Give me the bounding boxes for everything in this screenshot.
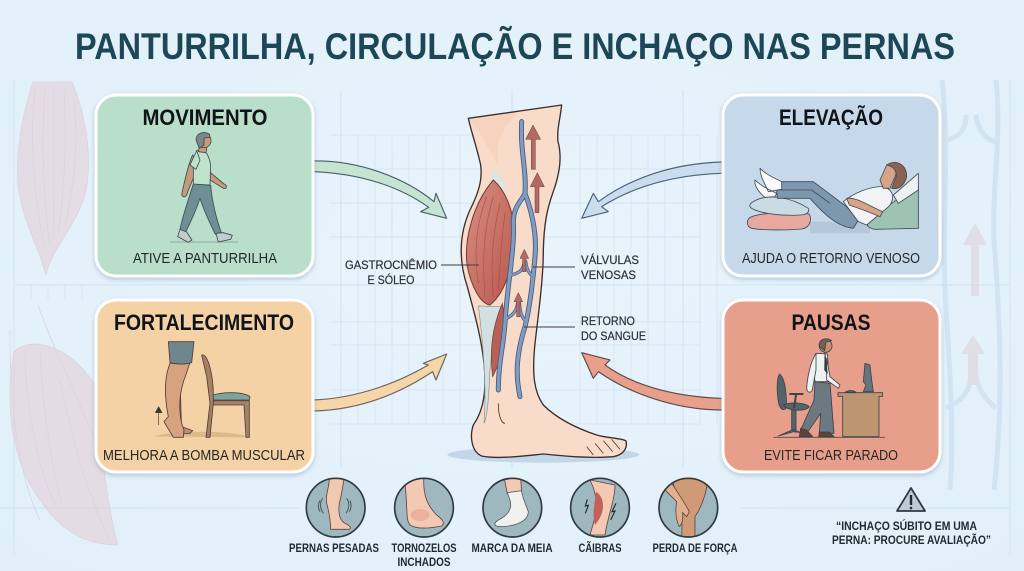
warning text: PERNA: PROCURE AVALIAÇÃO” [832,532,991,547]
heading: elevacao: ELEVAÇÃO [779,105,883,130]
caption: fortalecimento: MELHORA A BOMBA MUSCULAR [103,447,305,464]
symptom: pernas pesadas: PERNAS PESADAS [289,543,379,555]
icon: person resting with legs elevated [747,162,918,233]
panel: pausas [723,300,940,472]
symptom: marca da meia [472,477,552,555]
symptom: tornozelos inchados [392,477,457,569]
icon: walking person [170,133,238,242]
label: retorno do sangue [524,314,646,343]
label: retorno do sangue: RETORNO [581,314,635,328]
arrow: movimento to leg [313,161,447,218]
warning text: “INCHAÇO SÚBITO EM UMA [836,518,977,533]
warning text [832,518,991,547]
background: faint calf muscle bottom left [10,305,118,545]
caption: movimento: ATIVE A PANTURRILHA [133,250,277,267]
panel: fortalecimento [96,300,313,472]
label: gastrocnemio e soleo [345,257,479,287]
central leg illustration [447,105,639,463]
heading: movimento: MOVIMENTO [142,105,268,130]
icon: person leaving office desk [773,339,885,437]
arrow: elevacao to leg [582,162,722,218]
heading: fortalecimento: FORTALECIMENTO [114,310,294,335]
symptom: pernas pesadas [289,477,379,555]
label: retorno do sangue: DO SANGUE [581,329,646,343]
icon: calf raise with chair [154,342,252,437]
heading: pausas: PAUSAS [792,310,870,335]
symptom: caibras [571,478,629,555]
label: valvulas venosas [533,252,639,282]
symptom: perda de forca [652,477,738,555]
symptom: marca da meia: MARCA DA MEIA [472,543,552,555]
label: valvulas venosas: VÁLVULAS [581,252,639,267]
panel: elevacao [723,95,940,276]
background: faint veins and arrows right [942,80,1000,490]
label: valvulas venosas: VENOSAS [581,268,636,282]
arrow: pausas to leg [582,353,722,410]
background: faint calf muscle top left [18,82,89,275]
symptom: tornozelos inchados: INCHADOS [398,557,451,569]
symptom: caibras: CÃIBRAS [578,542,622,555]
arrow: fortalecimento to leg [313,354,447,411]
icon: warning triangle [897,488,925,511]
label: gastrocnemio e soleo: E SÓLEO [368,272,414,287]
caption: elevacao: AJUDA O RETORNO VENOSO [742,250,920,267]
panel: movimento [96,95,313,276]
symptom: perda de forca: PERDA DE FORÇA [652,543,738,555]
label: gastrocnemio e soleo: GASTROCNÊMIO [345,257,437,272]
symptom: tornozelos inchados: TORNOZELOS [392,543,457,555]
caption: pausas: EVITE FICAR PARADO [764,447,898,464]
